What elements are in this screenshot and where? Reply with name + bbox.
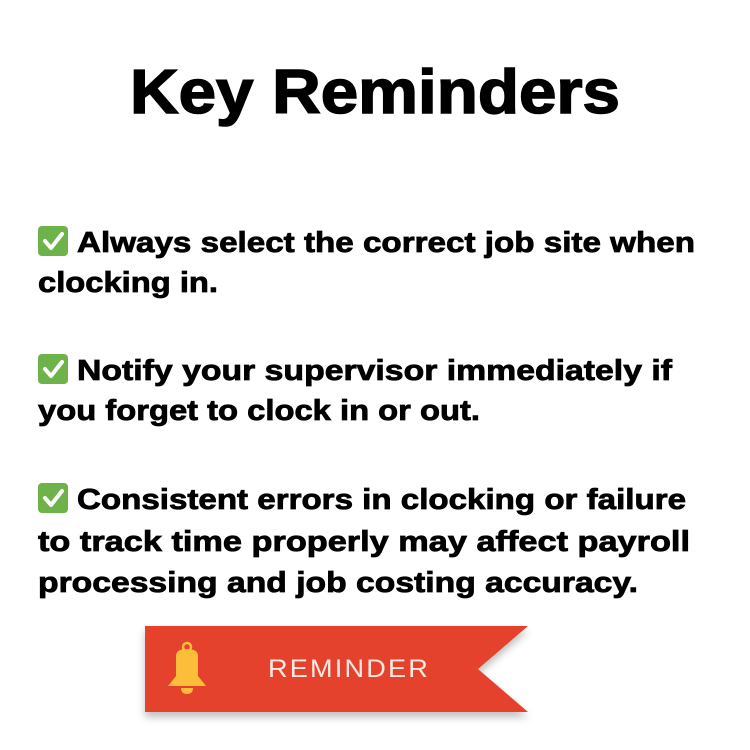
icon: check box 3	[38, 483, 68, 513]
icon: check box 1	[38, 226, 68, 256]
icon: bell	[168, 643, 206, 694]
reminder 1	[38, 226, 695, 299]
reminder 3: processing and job costing accuracy.	[38, 567, 638, 599]
reminder banner	[145, 626, 528, 712]
reminder 2: you forget to clock in or out.	[38, 395, 480, 427]
reminder banner: REMINDER	[268, 655, 430, 683]
reminder 3: Consistent errors in clocking or failure	[77, 484, 686, 516]
reminder 3	[38, 483, 690, 599]
icon: check box 2	[38, 354, 68, 384]
title: Key Reminders	[130, 58, 620, 127]
reminder 3: to track time properly may affect payroll	[38, 526, 690, 558]
reminder 1: Always select the correct job site when	[77, 227, 695, 259]
reminder 1: clocking in.	[38, 267, 218, 299]
reminder 2	[38, 354, 672, 427]
reminder 2: Notify your supervisor immediately if	[77, 355, 672, 387]
